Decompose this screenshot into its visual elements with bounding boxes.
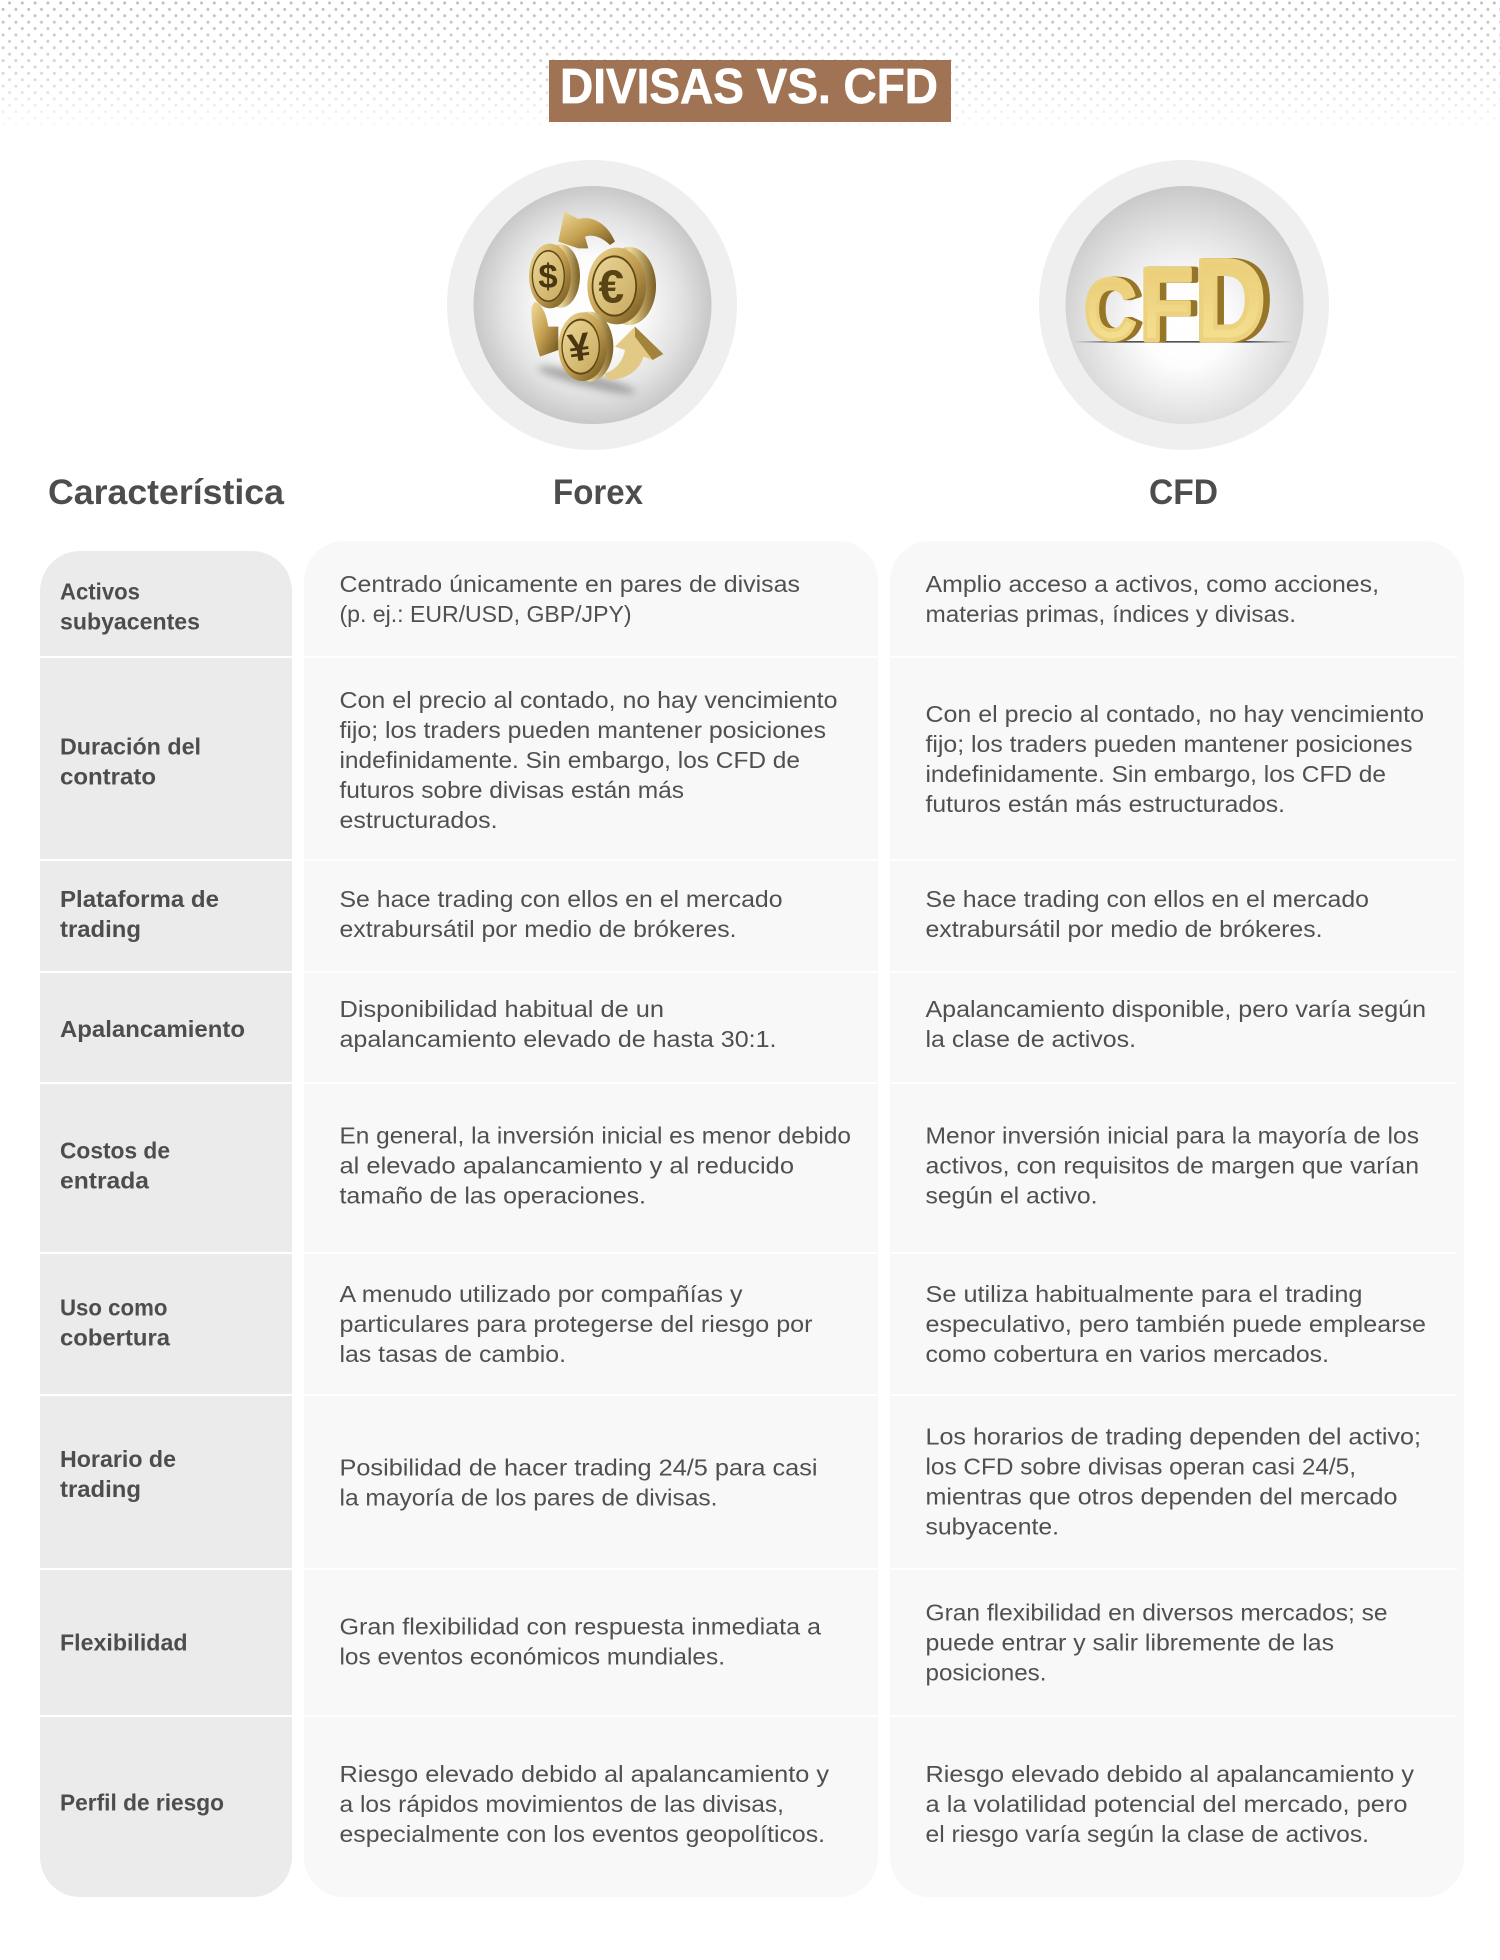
label: Costos de entrada	[60, 1138, 170, 1194]
text: CFD riesgo: Riesgo elevado debido al apalancamiento y	[926, 1761, 1414, 1787]
text: Forex duración: estructurados.	[340, 807, 498, 833]
label: Flexibilidad: Flexibilidad	[60, 1630, 188, 1656]
label: Plataforma de trading	[60, 886, 219, 942]
text: CFD cobertura	[926, 1281, 1426, 1367]
text: Forex activos: Centrado únicamente en pares de divisas	[340, 571, 800, 597]
text: CFD costos: según el activo.	[926, 1182, 1098, 1208]
text: Forex flexibilidad	[340, 1613, 822, 1669]
panel: CFD column	[890, 541, 1464, 1897]
text: Forex apalancamiento: Disponibilidad habitual de un	[340, 996, 664, 1022]
icon: forex coins in circle: €	[599, 261, 624, 313]
label: Apalancamiento: Apalancamiento	[60, 1016, 245, 1042]
text: Forex cobertura: las tasas de cambio.	[340, 1341, 566, 1367]
text: Forex costos: En general, la inversión inicial es menor debido	[340, 1122, 851, 1148]
panel: Forex column	[304, 541, 878, 1897]
text: CFD apalancamiento: Apalancamiento disponible, pero varía según	[926, 996, 1426, 1022]
label: Horario de trading: Horario de	[60, 1446, 176, 1472]
text: CFD horario: subyacente.	[926, 1513, 1059, 1539]
text: Forex riesgo: a los rápidos movimientos de las divisas,	[340, 1791, 784, 1817]
text: CFD activos: materias primas, índices y divisas.	[926, 601, 1296, 627]
title: DIVISAS VS. CFD	[560, 60, 938, 114]
text: CFD horario	[926, 1423, 1421, 1539]
text: Forex riesgo	[340, 1761, 829, 1847]
text: Forex costos: tamaño de las operaciones.	[340, 1182, 646, 1208]
text: CFD flexibilidad: Gran flexibilidad en diversos mercados; se	[926, 1600, 1388, 1626]
text: CFD flexibilidad: posiciones.	[926, 1660, 1046, 1686]
label: Perfil de riesgo: Perfil de riesgo	[60, 1790, 224, 1816]
label: Plataforma de trading: trading	[60, 916, 141, 942]
text: CFD costos	[926, 1122, 1419, 1208]
text: Forex duración	[340, 687, 838, 833]
icon: forex coins in circle: $	[538, 258, 558, 296]
text: Forex horario: Posibilidad de hacer trading 24/5 para casi	[340, 1454, 818, 1480]
text: Forex cobertura: particulares para protegerse del riesgo por	[340, 1311, 813, 1337]
text: CFD cobertura: como cobertura en varios mercados.	[926, 1341, 1329, 1367]
text: Forex apalancamiento	[340, 996, 776, 1052]
text: Forex cobertura	[340, 1281, 813, 1367]
text: Forex flexibilidad: los eventos económicos mundiales.	[340, 1643, 725, 1669]
label: Costos de entrada: Costos de	[60, 1138, 170, 1164]
label: Duración del contrato: Duración del	[60, 734, 201, 760]
text: CFD plataforma: extrabursátil por medio de brókeres.	[926, 916, 1322, 942]
text: Forex costos: al elevado apalancamiento y al reducido	[340, 1152, 794, 1178]
text: Forex horario: la mayoría de los pares de divisas.	[340, 1484, 718, 1510]
icon: forex coins in circle	[447, 160, 737, 450]
text: CFD apalancamiento: la clase de activos.	[926, 1026, 1136, 1052]
text: CFD flexibilidad	[926, 1600, 1388, 1686]
text: Forex activos: (p. ej.: EUR/USD, GBP/JPY)	[340, 601, 632, 627]
text: CFD activos: Amplio acceso a activos, como acciones,	[926, 571, 1379, 597]
text: Forex plataforma: extrabursátil por medio de brókeres.	[340, 916, 736, 942]
text: CFD cobertura: Se utiliza habitualmente para el trading	[926, 1281, 1362, 1307]
column header: Característica: Característica	[48, 473, 285, 512]
column header: CFD: CFD	[1149, 473, 1218, 512]
column header: Forex: Forex	[553, 473, 644, 512]
icon: CFD gold letters in circle	[1039, 160, 1329, 450]
label: Activos subyacentes	[60, 578, 200, 634]
text: CFD riesgo: a la volatilidad potencial del mercado, pero	[926, 1791, 1408, 1817]
text: CFD duración: Con el precio al contado, no hay vencimiento	[926, 701, 1424, 727]
label: Uso como cobertura: cobertura	[60, 1324, 171, 1350]
text: Forex duración: futuros sobre divisas están más	[340, 777, 684, 803]
text: CFD horario: los CFD sobre divisas operan casi 24/5,	[926, 1453, 1356, 1479]
icon: CFD gold letters in circle: D	[1195, 235, 1265, 365]
text: CFD apalancamiento	[926, 996, 1426, 1052]
text: Forex costos	[340, 1122, 851, 1208]
text: CFD riesgo: el riesgo varía según la clase de activos.	[926, 1821, 1369, 1847]
text: CFD flexibilidad: puede entrar y salir libremente de las	[926, 1630, 1334, 1656]
panel: característica column	[40, 551, 292, 1897]
label: Uso como cobertura	[60, 1294, 171, 1350]
text: CFD duración	[926, 701, 1424, 817]
text: CFD cobertura: especulativo, pero también puede emplearse	[926, 1311, 1426, 1337]
text: CFD horario: Los horarios de trading dependen del activo;	[926, 1423, 1421, 1449]
label: Plataforma de trading: Plataforma de	[60, 886, 219, 912]
text: Forex horario	[340, 1454, 818, 1510]
label: Activos subyacentes: subyacentes	[60, 608, 200, 634]
text: Forex activos	[340, 571, 800, 627]
label: Costos de entrada: entrada	[60, 1168, 150, 1194]
icon: CFD gold letters in circle: C	[1084, 261, 1136, 357]
text: Forex cobertura: A menudo utilizado por compañías y	[340, 1281, 743, 1307]
label: Horario de trading	[60, 1446, 176, 1502]
text: CFD duración: futuros están más estructurados.	[926, 791, 1285, 817]
icon: CFD gold letters in circle: F	[1139, 247, 1193, 363]
text: CFD plataforma: Se hace trading con ellos en el mercado	[926, 886, 1369, 912]
label: Uso como cobertura: Uso como	[60, 1294, 168, 1320]
text: CFD riesgo	[926, 1761, 1414, 1847]
text: CFD costos: Menor inversión inicial para la mayoría de los	[926, 1122, 1419, 1148]
text: CFD duración: indefinidamente. Sin embargo, los CFD de	[926, 761, 1386, 787]
text: CFD duración: fijo; los traders pueden mantener posiciones	[926, 731, 1412, 757]
label: Duración del contrato: contrato	[60, 764, 156, 790]
text: Forex riesgo: Riesgo elevado debido al apalancamiento y	[340, 1761, 829, 1787]
text: Forex flexibilidad: Gran flexibilidad con respuesta inmediata a	[340, 1613, 822, 1639]
text: Forex duración: fijo; los traders pueden mantener posiciones	[340, 717, 826, 743]
label: Duración del contrato	[60, 734, 201, 790]
text: Forex duración: indefinidamente. Sin embargo, los CFD de	[340, 747, 800, 773]
text: CFD plataforma	[926, 886, 1369, 942]
text: CFD costos: activos, con requisitos de margen que varían	[926, 1152, 1419, 1178]
text: CFD horario: mientras que otros dependen del mercado	[926, 1483, 1398, 1509]
icon: forex coins in circle: ¥	[565, 324, 593, 371]
text: Forex plataforma: Se hace trading con ellos en el mercado	[340, 886, 782, 912]
label: Horario de trading: trading	[60, 1476, 141, 1502]
text: Forex plataforma	[340, 886, 782, 942]
text: Forex duración: Con el precio al contado, no hay vencimiento	[340, 687, 838, 713]
text: Forex riesgo: especialmente con los eventos geopolíticos.	[340, 1821, 825, 1847]
text: CFD activos	[926, 571, 1379, 627]
label: Activos subyacentes: Activos	[60, 578, 140, 604]
text: Forex apalancamiento: apalancamiento elevado de hasta 30:1.	[340, 1026, 776, 1052]
